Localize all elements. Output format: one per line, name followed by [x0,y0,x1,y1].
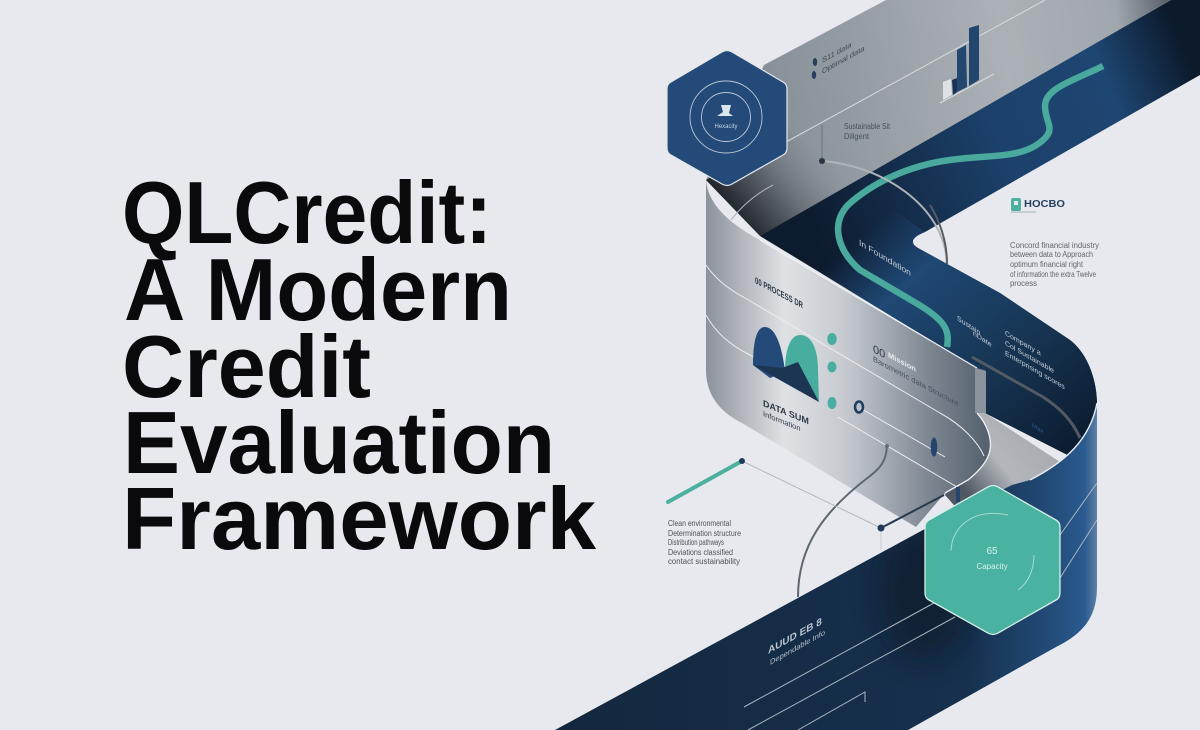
ribbon text: Enterprising scores [1005,349,1065,391]
label: top middle: Diligent [844,132,870,141]
sheet flap [975,368,986,413]
title: QLCredit: [122,163,492,262]
title [122,163,597,568]
grey connector arc [819,125,947,264]
hexagon: navy [667,50,787,186]
panel: dark navy ribbon [760,0,1200,470]
right paragraph: of information the extra Twelve [1010,270,1096,279]
sheet labels [755,276,959,433]
sheet labels: DATA SUM [763,398,809,427]
left caption: Deviations classified [668,548,733,557]
band label: Dependable Info [770,628,825,667]
label: top middle [844,122,891,141]
right paragraph: process [1010,279,1037,288]
sheet labels: 00 [873,343,886,362]
panel: dark navy ribbon: Max [1032,422,1044,436]
right paragraph: Concord financial industry [1010,241,1099,250]
top plane label: S11 data [822,40,852,65]
right paragraph: optimum financial right [1010,260,1084,269]
sheet markers [827,333,937,456]
teal callout stroke [668,458,958,550]
ribbon text: Col Sustainable [1005,339,1054,375]
sheet labels: Mission [888,350,916,374]
sheet labels: Barometric data Structure [873,354,959,409]
right heading with icon [1011,198,1065,212]
left caption: Distribution pathways [668,538,724,547]
right paragraph: between data to Approach [1010,250,1093,259]
ribbon text: nDate [973,329,992,349]
divider line on upper plane [786,0,1045,142]
band lines [744,483,1097,730]
title: A Modern [124,240,512,339]
ribbon text: Company a [1005,329,1041,358]
left caption [668,519,741,566]
label: top middle: Sustainable Sit [844,122,891,131]
right heading with icon: HOCBO [1024,198,1065,210]
panel: curved silver sheet [706,180,990,527]
sheet labels: Information [763,409,801,433]
connector curve from sheet [798,446,887,597]
panel: outer navy band [555,403,1097,730]
top plane label: Optimal data [822,44,865,76]
right paragraph [1010,241,1099,288]
ribbon text: Sustain [957,314,980,337]
hexagon: teal [925,486,1060,634]
hexagon: teal: Capacity [976,562,1008,571]
ribbon label: In Foundation [859,238,911,278]
left caption: Clean environmental [668,519,731,528]
bar chart [940,25,994,103]
top plane label [812,40,865,79]
title: Framework [122,469,597,568]
ribbon text [957,314,1065,391]
left caption: Determination structure [668,529,741,538]
sheet labels: 00 PROCESS DR [755,276,803,311]
strip inside ribbon [972,357,1080,438]
band label: AUUD EB 8 [768,616,822,657]
teal flow line [838,66,1103,347]
chart: humps [753,327,819,402]
panel: upper grey plane [706,0,1171,236]
left caption: contact sustainability [668,557,740,566]
title: Credit [122,317,371,416]
sheet lines [706,265,984,487]
panel: inner floor [945,412,1060,512]
title: Evaluation [123,393,555,492]
hexagon icon [717,105,733,116]
hexagon: navy: Hexacity [714,124,738,130]
hexagon: teal: 65 [986,546,998,557]
